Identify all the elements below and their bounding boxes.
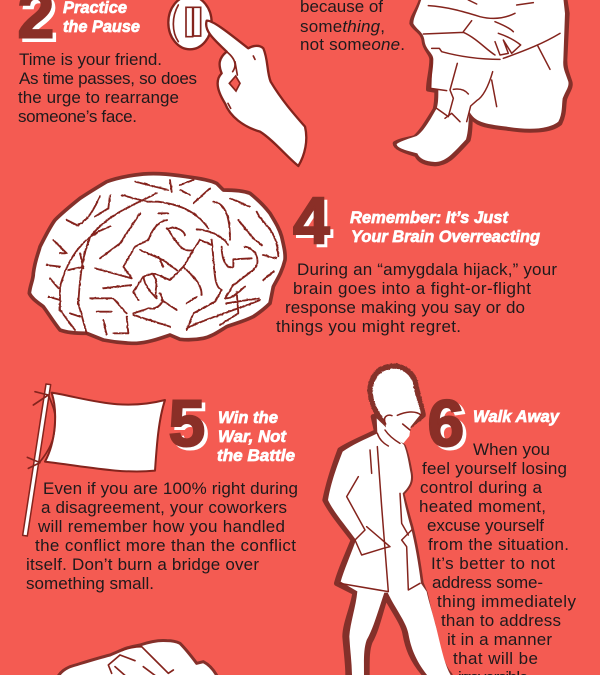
step 6: body text: address some- (432, 573, 543, 592)
step 2: body text: someone’s face. (18, 107, 137, 126)
step 3: body text (cropped): not someone. (300, 35, 405, 54)
step 4: heading: Remember: It’s Just (350, 209, 510, 227)
step 5: body text: itself. Don’t burn a bridge over (26, 555, 259, 574)
illustration: fist (cropped at bottom) (57, 641, 218, 675)
step 5: heading: War, Not (218, 428, 288, 446)
step 6: body text: heated moment, (419, 497, 546, 516)
step 6: body text (419, 440, 576, 675)
step 4: number: 4 (296, 186, 333, 260)
step 6: heading: Walk Away (473, 408, 560, 426)
step 2: body text: As time passes, so does (19, 69, 197, 88)
step 4: body text (276, 260, 557, 336)
step 3: body text (cropped): something, (300, 17, 385, 36)
step 4: heading: Your Brain Overreacting (351, 228, 540, 246)
step 6: body text: control during a (420, 478, 543, 497)
step 5: heading: the Battle (217, 447, 295, 465)
step 5: body text (26, 479, 298, 593)
step 2: body text: Time is your friend. (19, 50, 162, 69)
step 5: body text: something small. (26, 574, 154, 593)
step 6: body text: When you (473, 440, 550, 459)
step 3: body text (cropped) (300, 0, 405, 54)
step 6: body text: it in a manner (447, 630, 552, 649)
step 5: body text: a disagreement, your coworkers (41, 498, 287, 517)
step 2: body text: the urge to rearrange (18, 88, 179, 107)
illustration: brain (29, 174, 285, 343)
step 6: number: 6 (431, 389, 468, 463)
step 2: body text (18, 50, 197, 126)
icon: hand pressing pause button (168, 0, 306, 166)
step 4: heading (350, 209, 540, 246)
woman: white silhouette (328, 369, 452, 675)
illustration: seated person hugging knees (395, 0, 570, 164)
step 5: body text: Even if you are 100% right during (43, 479, 298, 498)
step 6: body text: feel yourself losing (422, 459, 567, 478)
step 5: heading: Win the (218, 409, 278, 427)
step 4: body text: things you might regret. (276, 317, 461, 336)
step 4: body text: During an “amygdala hijack,” your (297, 260, 557, 279)
step 5: number: 5 (172, 389, 209, 463)
step 5: number: 5 (168, 386, 205, 460)
step 6: body text: that will be (453, 649, 538, 668)
step 6: body text: than to address (441, 611, 561, 630)
illustration: woman walking away (325, 366, 452, 675)
illustration: white flag (23, 384, 165, 536)
woman: shadow silhouette (325, 366, 450, 675)
step 6: body text: from the situation. (428, 535, 569, 554)
woman: line details (340, 412, 421, 592)
step 4: body text: response making you say or do (285, 298, 525, 317)
step 5: body text: the conflict more than the conflict (35, 536, 296, 555)
step 4: body text: brain goes into a fight-or-flight (293, 279, 531, 298)
step 6: body text: It’s better to not (431, 554, 555, 573)
step 6: number: 6 (428, 386, 464, 460)
step 5: body text: will remember how you handled (37, 517, 285, 536)
step 6: body text: excuse yourself (427, 516, 544, 535)
step 5: heading (217, 409, 295, 465)
step 6: body text: thing immediately (437, 592, 576, 611)
step 2: heading (63, 0, 140, 36)
step 4: number: 4 (293, 183, 330, 257)
step 2: heading: the Pause (63, 18, 140, 36)
